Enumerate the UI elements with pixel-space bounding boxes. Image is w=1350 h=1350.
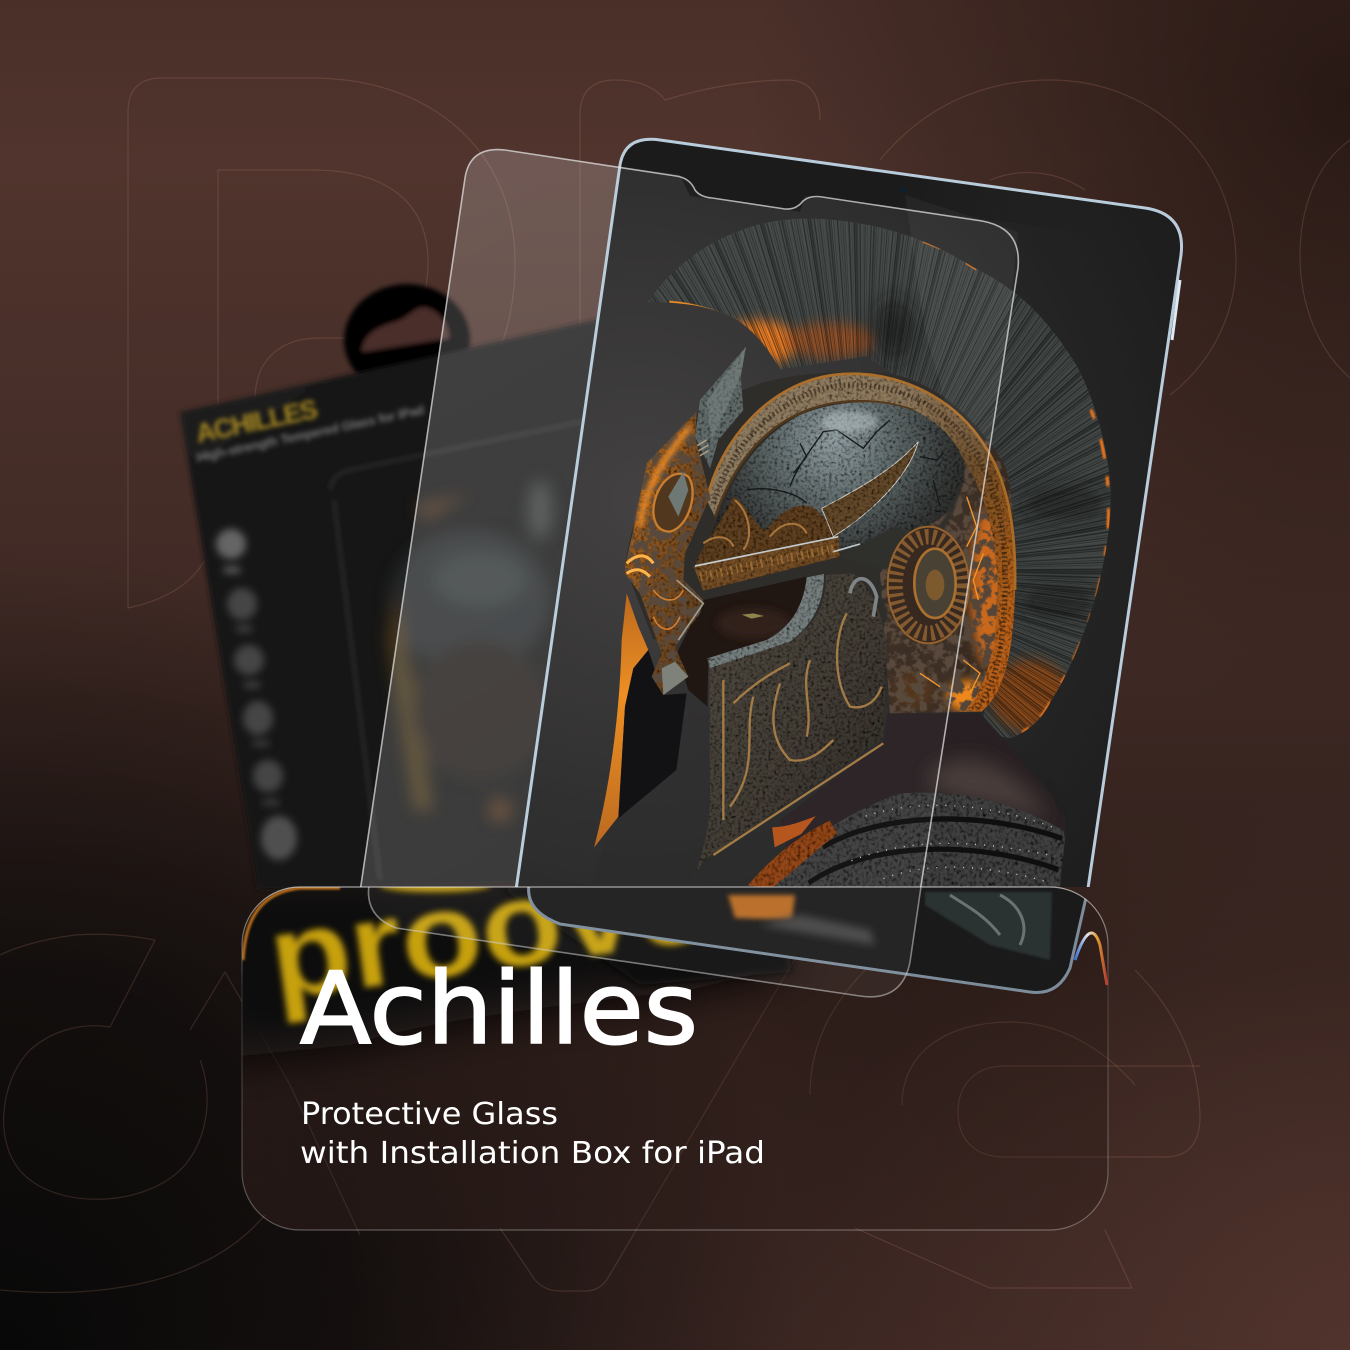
box feature icons — [216, 529, 297, 860]
blurred helmet on box — [388, 480, 552, 822]
helmet shell, part two — [594, 347, 1020, 878]
tablet side buttons — [1172, 280, 1180, 340]
crest band — [707, 374, 1015, 712]
neck — [782, 714, 1066, 831]
subtitle — [300, 1097, 765, 1171]
refracted helmet — [728, 892, 1052, 960]
cheek guard — [694, 573, 887, 878]
front blade — [594, 593, 648, 848]
forehead gold crest — [625, 412, 710, 695]
crest cracks — [625, 414, 710, 688]
iridescent edges — [243, 888, 340, 960]
eye — [742, 613, 764, 619]
helmet plume — [648, 218, 1110, 738]
band rim — [707, 374, 1015, 590]
brow band rim — [695, 537, 860, 566]
tablet body — [518, 166, 1180, 887]
card border — [242, 887, 1108, 1230]
helmet silhouette — [625, 372, 1014, 713]
box hanger — [344, 284, 470, 396]
box body — [180, 310, 700, 890]
subtitle line 2: with Installation Box for iPad — [300, 1136, 765, 1171]
shoulder orange trim — [748, 821, 837, 890]
nose tip — [662, 662, 688, 695]
cheek ring — [850, 579, 877, 617]
dome right shade — [856, 487, 962, 570]
top spike — [695, 347, 746, 468]
product box, blurred behind glass — [180, 284, 700, 890]
skin — [717, 608, 790, 638]
rear shell glow — [880, 440, 1020, 717]
ear disc — [887, 526, 970, 644]
spine ribs — [697, 439, 709, 456]
box subtitle: High-strength Tempered Glass for iPad — [196, 402, 426, 465]
refracted tablet — [529, 880, 1090, 992]
top bezel and camera — [622, 141, 1110, 724]
scrollwork — [695, 497, 840, 567]
shoulder armor — [774, 792, 1066, 887]
helmet plume and body, part one — [634, 209, 1116, 900]
refracted brand name: proove — [261, 832, 715, 1026]
card tint — [242, 887, 1108, 1230]
box device outline — [330, 420, 590, 880]
steel dome — [712, 402, 965, 552]
dome highlight — [822, 411, 878, 432]
brow band — [693, 537, 840, 591]
band engraving — [713, 385, 1005, 708]
protective glass back layer — [361, 150, 618, 887]
feather ornament — [822, 442, 918, 537]
subtitle line 1: Protective Glass — [301, 1097, 558, 1132]
eye opening rim — [707, 574, 824, 668]
crest glow — [627, 427, 703, 640]
brow band inscription — [700, 548, 833, 577]
shoulder highlights — [851, 805, 1059, 883]
title: Achilles — [300, 952, 698, 1067]
glass glare — [905, 195, 1018, 470]
cheek engravings — [713, 613, 883, 855]
refracted box — [202, 870, 790, 1060]
protective glass front layer — [360, 150, 1018, 892]
glass info card — [202, 832, 1108, 1230]
dome cracks — [747, 420, 943, 507]
refracted glass edge — [368, 880, 922, 997]
tablet edge — [516, 139, 1182, 970]
tablet with helmet artwork — [516, 130, 1190, 970]
face shadow — [677, 577, 807, 707]
box title: ACHILLES — [193, 394, 321, 449]
nasal shadow — [618, 650, 687, 818]
